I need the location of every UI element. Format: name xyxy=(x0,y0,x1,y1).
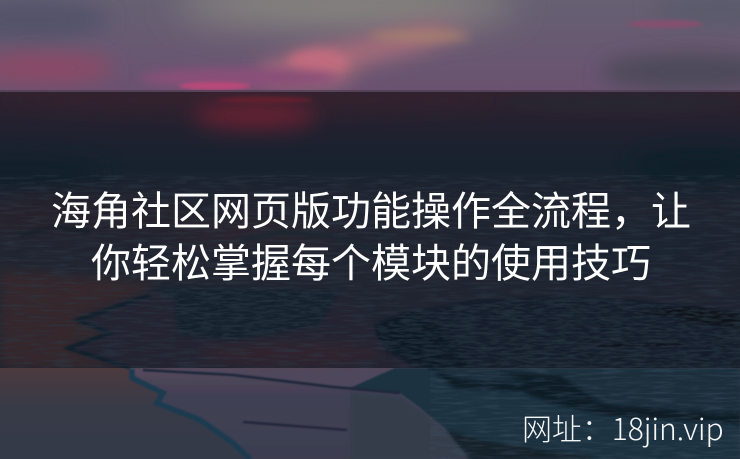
left sand xyxy=(0,270,160,368)
right foam xyxy=(350,368,740,459)
textured water between waves xyxy=(150,287,340,340)
sea and beach xyxy=(0,92,740,459)
grain xyxy=(0,175,740,368)
sky reflection xyxy=(0,92,740,188)
lower beach base xyxy=(0,366,740,459)
foam area left in band xyxy=(68,290,440,368)
dark overlay band xyxy=(0,92,740,368)
title: 海角社区网页版功能操作全流程，让 xyxy=(51,190,691,234)
foam edge upper xyxy=(68,295,150,368)
sky xyxy=(0,0,740,92)
wave crests xyxy=(20,226,90,236)
mid water tone xyxy=(204,226,274,238)
title: 你轻松掌握每个模块的使用技巧 xyxy=(91,242,651,286)
website label: 网址：18jin.vip xyxy=(522,405,724,449)
foam edge lines xyxy=(143,370,400,393)
right wave in band xyxy=(412,296,740,354)
title xyxy=(51,190,691,286)
